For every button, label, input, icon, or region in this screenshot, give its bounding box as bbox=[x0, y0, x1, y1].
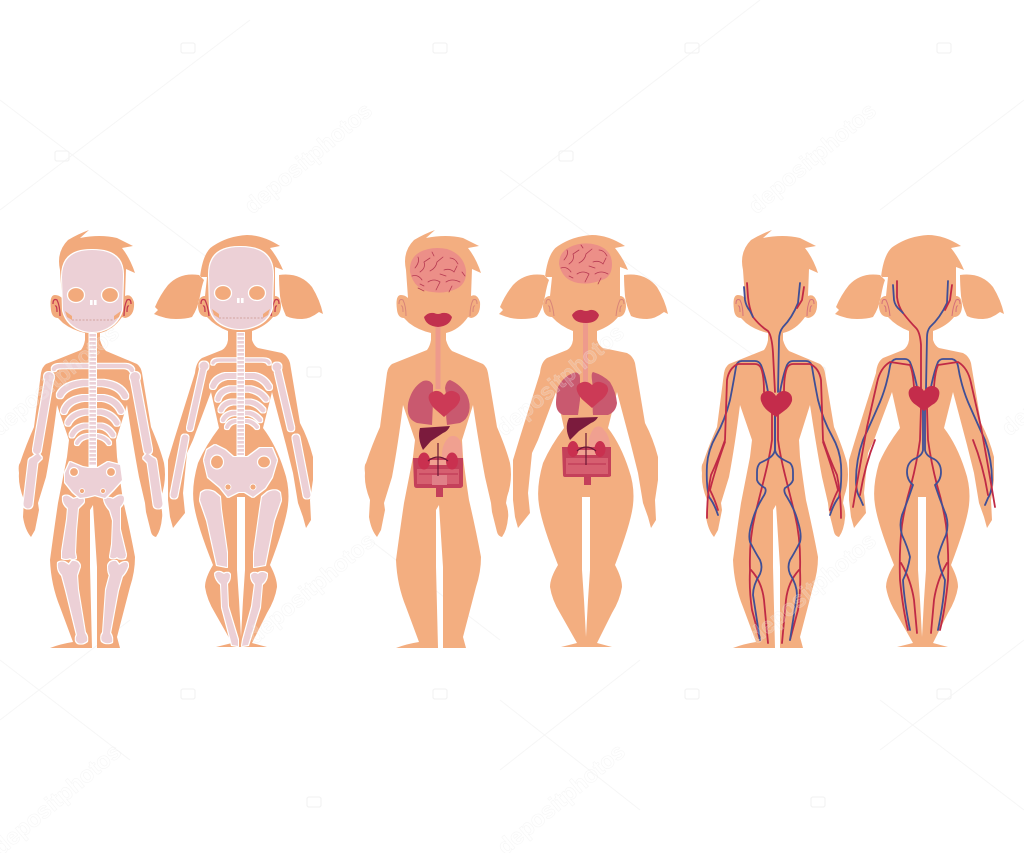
skull bbox=[209, 247, 273, 329]
heart bbox=[429, 391, 460, 417]
vessels: torso and legs bbox=[749, 412, 775, 643]
boy silhouette bbox=[19, 230, 165, 648]
vessels: arms bbox=[707, 361, 768, 518]
mouth bbox=[424, 313, 452, 327]
panel: circulation girl bbox=[835, 235, 1004, 647]
esophagus bbox=[436, 327, 440, 389]
kidneys and vessels bbox=[568, 433, 606, 465]
watermark text: depositphotos bbox=[743, 97, 881, 219]
panel: skeleton boy bbox=[19, 230, 165, 648]
heart bbox=[761, 391, 792, 417]
kidneys and vessels bbox=[418, 443, 458, 476]
watermark text: depositphotos bbox=[743, 527, 881, 649]
icon: ears bbox=[882, 300, 960, 316]
skull details bbox=[212, 286, 270, 318]
heart bbox=[909, 386, 939, 411]
icon: ears bbox=[736, 300, 814, 316]
panel: circulation boy bbox=[702, 230, 848, 648]
vessels: head and neck bbox=[744, 283, 804, 392]
bones: ribs, arms, legs bbox=[28, 366, 158, 644]
icon: ears bbox=[53, 300, 131, 316]
vessels: head and neck bbox=[893, 281, 952, 389]
icon: ears bbox=[546, 300, 624, 316]
lungs bbox=[408, 380, 470, 425]
liver bbox=[419, 426, 450, 450]
watermark text: depositphotos bbox=[239, 97, 377, 219]
icon: ears bbox=[201, 300, 279, 316]
pelvis bbox=[204, 445, 277, 497]
vessels: torso and legs bbox=[900, 408, 923, 633]
vessels: arms bbox=[853, 359, 917, 507]
intestines bbox=[413, 458, 463, 497]
panel: organs boy bbox=[365, 230, 511, 648]
stomach bbox=[588, 426, 610, 447]
girl silhouette bbox=[154, 235, 323, 647]
boy silhouette bbox=[702, 230, 848, 648]
watermark text: depositphotos bbox=[491, 319, 629, 441]
intestines bbox=[562, 447, 611, 485]
girl silhouette bbox=[499, 235, 668, 647]
mouth bbox=[572, 310, 599, 323]
girl silhouette bbox=[835, 235, 1004, 647]
skull bbox=[62, 250, 123, 332]
panel: organs girl bbox=[499, 235, 668, 647]
spine bbox=[88, 333, 97, 467]
icon: ears bbox=[399, 300, 477, 316]
esophagus bbox=[583, 323, 588, 385]
liver bbox=[567, 417, 598, 440]
panel: skeleton girl bbox=[154, 235, 323, 647]
heart bbox=[577, 382, 608, 408]
boy silhouette bbox=[365, 230, 511, 648]
brain bbox=[559, 243, 612, 284]
watermark text: depositphotos bbox=[242, 527, 380, 649]
bones: ribs, arms, legs bbox=[174, 360, 307, 646]
pelvis bbox=[65, 462, 122, 498]
skull details bbox=[65, 288, 121, 320]
stomach bbox=[442, 436, 462, 458]
spine bbox=[236, 332, 245, 456]
lungs bbox=[556, 372, 617, 415]
brain bbox=[410, 248, 466, 293]
